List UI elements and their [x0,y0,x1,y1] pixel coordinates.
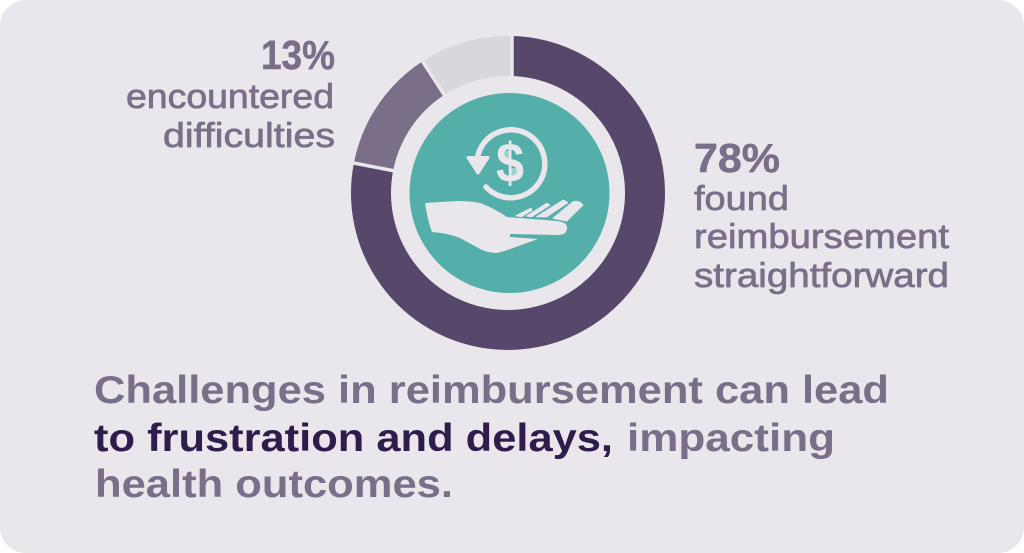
stat: 13%: 13% [261,32,335,78]
segment: 78% straightforward [371,56,645,330]
label: encountered difficulties [126,78,335,155]
icon: circular arrow [468,130,545,198]
label: found reimbursement straightforward [694,180,949,295]
label: found reimbursement straightforward: straightforward [694,257,949,295]
label: encountered difficulties: encountered [126,78,334,116]
conclusion text: health outcomes. [95,463,453,506]
label: found reimbursement straightforward: reimbursement [694,218,949,256]
conclusion text [94,369,889,506]
icon: hand receiving refund [410,93,610,293]
label: found reimbursement straightforward: found [694,180,789,218]
icon: open hand [425,200,583,253]
conclusion text: Challenges in reimbursement can lead [94,369,889,412]
segment: 13% encountered difficulties [374,78,433,167]
icon: dollar sign: $ [496,133,524,195]
label: encountered difficulties: difficulties [163,117,335,155]
conclusion text: to frustration and delays, [94,417,613,460]
donut chart [349,30,645,330]
segment: remaining share [433,56,512,78]
conclusion text: impacting [627,417,835,460]
callout: 78% found reimbursement straightforward [694,135,949,295]
stat: 78%: 78% [694,135,780,181]
teal circle [410,93,610,293]
callout: 13% encountered difficulties [126,32,335,155]
